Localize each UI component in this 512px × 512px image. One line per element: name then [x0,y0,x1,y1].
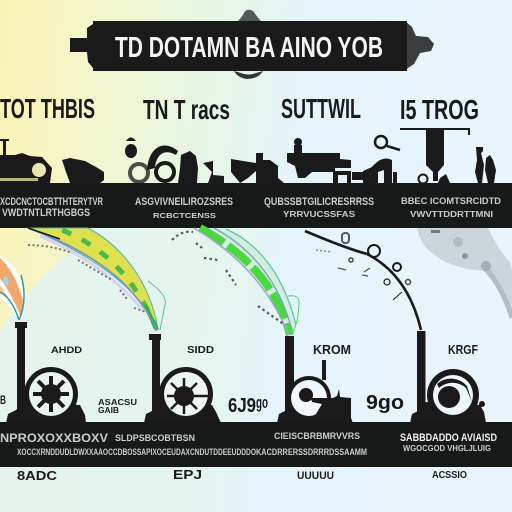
plume 2 particles [28,245,146,312]
plume 3: green [192,228,299,335]
figures [475,147,496,183]
side label 1: AHDD [51,345,83,355]
column heading 4: I5 TROG [400,94,479,125]
band 1 caption 3: YRRVUCSSFAS [283,210,356,219]
upper info band [0,183,512,228]
side label 5: ASACSU [98,398,137,407]
banner ornament bottom [234,71,263,79]
band 2 caption 1 [0,431,195,445]
band 1 caption 4 [401,196,502,219]
band 1 caption 1: XCDCNCTOCBTTHTERYTVR [0,196,103,208]
column heading 1: TOT THBIS [0,93,95,124]
plume 5: grey smoke [417,228,512,318]
footer label 3: UUUUU [297,470,334,482]
side label 8: B [0,393,6,407]
side label 9: go [256,393,268,412]
side label 3: KROM [313,342,351,357]
plume 3 particles [172,232,285,325]
side label 4: KRGF [448,342,478,357]
footer label 4: ACSSIO [432,470,467,481]
chimney 4 [417,331,426,426]
band 1 caption 3: QUBSSBTGILICRESRRSS [264,196,374,208]
icon: valve ring [375,136,400,150]
band 1 caption 2 [135,196,233,220]
plume 4: dark line [305,231,421,330]
title text: TD DOTAMN BA AINO YOB [115,32,383,64]
band 2 caption 1: SLDPSBCOBTBSN [115,433,195,443]
machinery silhouettes [0,128,496,184]
wheel unit 4 [410,369,486,423]
chimney 1 [15,322,27,425]
footer label 2: EPJ [173,467,202,482]
band 2 caption 1: NPROXOXXBOXV [0,431,108,445]
machine: lathe [287,138,397,183]
side label 6: 6J9 [228,395,256,417]
chimney 3 [285,336,294,426]
band 2 caption 4: CIEISCBRBMRVVRS [274,431,360,441]
band 1 caption 3 [264,196,374,219]
band 1 caption 1 [0,196,103,219]
column heading 3: SUTTWIL [281,93,361,124]
band 1 caption 2: RCBCTCENSS [153,213,216,220]
title banner [70,10,434,79]
machine: gears and boiler [125,138,224,183]
banner right end [405,21,434,70]
band 2 caption 3: KACDRRERSSDRRRDSSAAMM [256,447,367,457]
side label 7: 9go [366,392,404,414]
wheel unit 2 [144,367,221,423]
wheel unit 1 [6,367,86,423]
machine: vertical press [400,128,470,184]
chimneys and wheels [6,322,486,426]
band 1 caption 4: VWVTTDDRTTMNI [410,210,493,219]
plume 2: yellow green [28,228,165,330]
chimney 2 [149,334,161,426]
machine: press [231,153,284,183]
banner body [93,21,407,71]
lower info band [0,422,512,467]
band 1 caption 2: ASGVIVNEILIROZSRES [135,196,233,208]
band 1 caption 1: VWDTNTLRTHGBGS [2,207,90,219]
band 2 caption 6: WGOCGOD VHGLJLUIG [403,444,491,453]
wheel unit 3 [277,360,353,423]
banner left end [70,24,93,68]
machine: locomotive [0,139,52,183]
band 1 caption 4: BBEC ICOMTSRCIDTD [401,196,502,206]
banner ornament top [238,10,261,21]
band 2 caption 2: XOCCXRNDDUDLDWXXAAOCCDBOSSAPIXOCEUDAXCNDUTDDEEUDDDO [17,447,256,457]
side label 5: GAIB [98,406,119,415]
machine: wagon [62,158,104,183]
column heading 2: TN T racs [143,94,230,125]
side label 2: SIDD [187,345,214,356]
side label 5 [98,398,137,415]
footer label 1: 8ADC [17,468,58,483]
plume 1: orange [0,256,25,320]
